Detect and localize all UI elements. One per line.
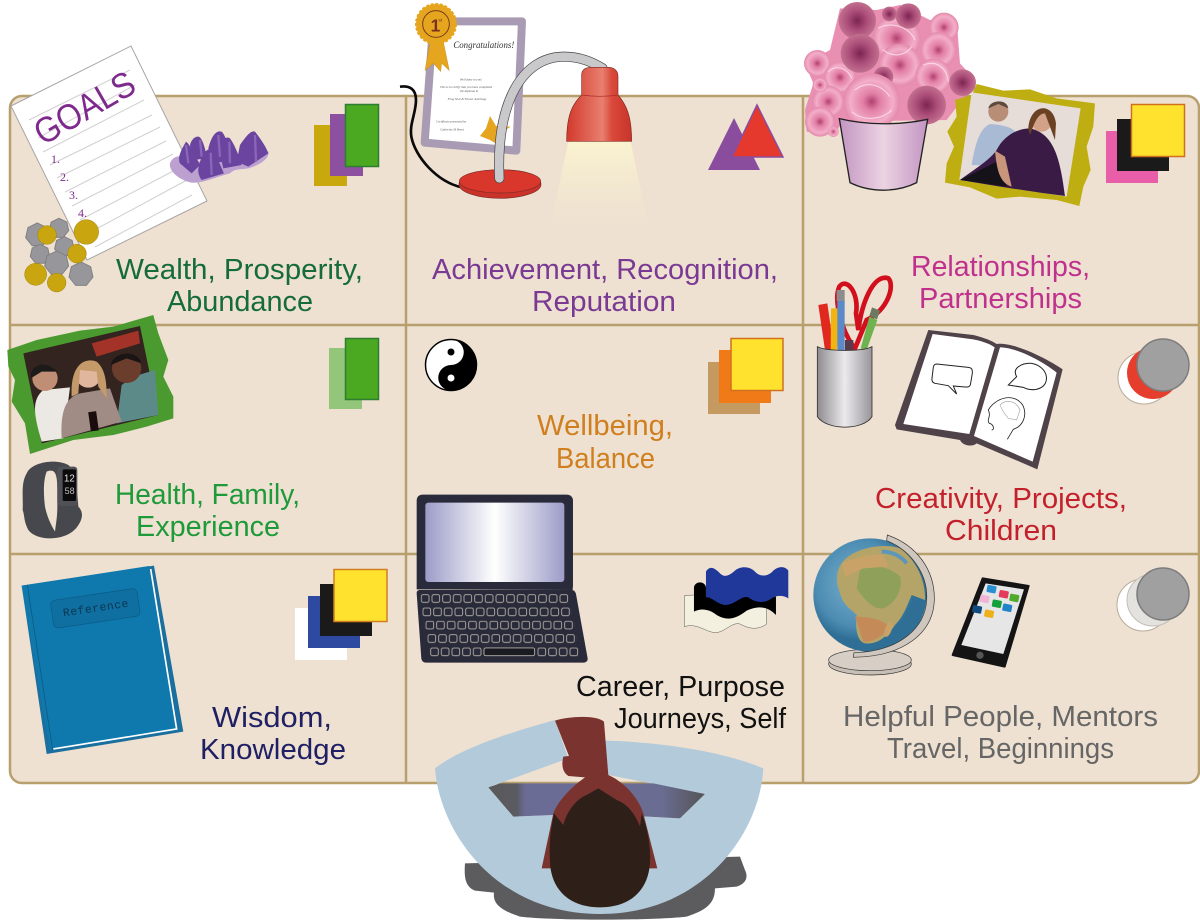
icon: pencil cup with scissors: [817, 278, 891, 427]
heading: health: Health, Family,: [115, 479, 300, 511]
icon: goals paper: 3.: [69, 188, 78, 202]
icon: coins: [25, 218, 99, 292]
heading: creativity: [875, 483, 1127, 547]
heading: wellbeing: Balance: [556, 443, 655, 475]
panel: desk bagua grid: [10, 96, 1199, 783]
icon: goals paper: 2.: [60, 170, 69, 184]
icon: certificate: Catherine M Brent: [440, 128, 464, 132]
icon: certificate: Well done to you!: [460, 78, 482, 82]
heading: career: Career, Purpose: [576, 671, 785, 703]
photo: couple in olive frame: [945, 84, 1095, 206]
icon: certificate: Certificate presented by: [436, 120, 467, 124]
icon: open book with speech bubbles and brain: [895, 330, 1063, 469]
heading: wealth: Wealth, Prosperity,: [116, 254, 363, 286]
heading: health: [115, 479, 300, 543]
icon: health colour swatches: [329, 338, 378, 409]
icon: certificate: [416, 4, 522, 151]
icon: amethyst crystal: [170, 131, 268, 183]
heading: wisdom: Knowledge: [200, 734, 346, 766]
photo: family in green frame: [7, 315, 173, 454]
heading: helpful people: Travel, Beginnings: [887, 733, 1114, 765]
icon: fitness tracker: 12: [64, 474, 75, 485]
icon: relationship colour swatches: [1106, 104, 1184, 183]
icon: goals paper: 4.: [78, 206, 87, 220]
heading: career: [576, 671, 787, 735]
icon: certificate: st: [438, 17, 443, 23]
icon: reference book: [22, 566, 183, 754]
icon: smartphone: [953, 578, 1029, 667]
icon: goals paper: GOALS: [27, 62, 142, 153]
heading: relationships: Partnerships: [919, 283, 1082, 315]
heading: achievement: Achievement, Recognition,: [432, 254, 778, 286]
heading: wisdom: [200, 702, 346, 766]
icon: goals paper: [11, 46, 207, 260]
icon: certificate: This is to certify that you have completed: [440, 85, 492, 89]
icon: goals paper: 1.: [51, 152, 60, 166]
icon: certificate: Congratulations!: [453, 41, 514, 51]
icon: yin yang: [426, 340, 477, 390]
icon: reference book: Reference: [62, 599, 130, 620]
icon: achievement triangles: [708, 105, 783, 170]
icon: fitness tracker: 58: [65, 486, 75, 496]
icon: creativity colour discs: [1118, 339, 1189, 404]
icon: potted roses: [804, 2, 976, 190]
icon: helpful people colour discs: [1117, 568, 1189, 631]
icon: certificate: Feng Shui & Flower Astrology: [447, 97, 487, 101]
heading: career: Journeys, Self: [614, 703, 787, 735]
icon: certificate: the diploma in: [460, 89, 479, 93]
heading: achievement: [432, 254, 778, 318]
heading: relationships: Relationships,: [911, 251, 1090, 283]
heading: helpful people: Helpful People, Mentors: [843, 701, 1158, 733]
icon: fitness tracker: [23, 462, 82, 538]
illustration: person seated at desk, seen from behind: [435, 717, 763, 920]
heading: wealth: [116, 254, 363, 318]
icon: globe: [813, 535, 934, 675]
heading: wealth: Abundance: [167, 286, 313, 318]
icon: career water waves: [684, 567, 788, 633]
icon: certificate: 1: [431, 16, 441, 36]
icon: desk lamp: [400, 57, 648, 227]
icon: wisdom colour swatches: [295, 570, 387, 660]
heading: wellbeing: [537, 410, 673, 475]
heading: relationships: [911, 251, 1090, 315]
icon: wealth colour swatches: [314, 104, 378, 186]
icon: laptop: [417, 495, 588, 663]
heading: achievement: Reputation: [532, 286, 676, 318]
heading: health: Experience: [136, 511, 280, 543]
heading: wisdom: Wisdom,: [212, 702, 332, 734]
heading: wellbeing: Wellbeing,: [537, 410, 673, 442]
heading: creativity: Children: [945, 515, 1057, 547]
heading: creativity: Creativity, Projects,: [875, 483, 1127, 515]
icon: wellbeing colour swatches: [708, 338, 783, 414]
heading: helpful people: [843, 701, 1158, 765]
